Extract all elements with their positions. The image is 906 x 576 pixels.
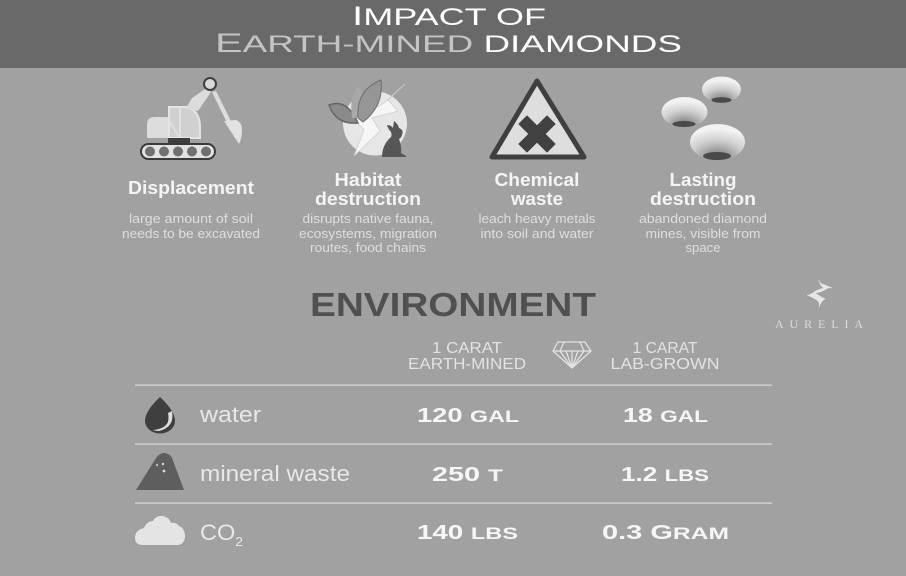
heading: Habitat — [334, 170, 402, 190]
column header: lab-grown: LAB-GROWN — [610, 356, 720, 373]
label: CO — [200, 520, 233, 545]
row: co2 — [135, 516, 729, 549]
description — [478, 212, 596, 241]
section heading: environment: ENVIRONMENT — [310, 286, 596, 323]
description: ecosystems, migration — [299, 227, 437, 241]
label: water — [199, 402, 261, 427]
panel: lasting destruction — [639, 76, 767, 255]
earth-mined value: 120 GAL — [417, 405, 519, 427]
icon: water drop — [145, 397, 175, 434]
icon: cloud — [135, 516, 185, 545]
column header: lab-grown: 1 CARAT — [632, 340, 698, 357]
heading: Chemical — [494, 170, 580, 190]
table row dividers — [135, 384, 772, 504]
title — [215, 1, 682, 58]
title: E ARTH-MINED DIAMONDS — [215, 28, 682, 58]
title: IMPACT OF — [352, 1, 546, 31]
icon: mine pits — [662, 76, 745, 160]
description: large amount of soil — [129, 212, 253, 226]
description: disrupts native fauna, — [302, 212, 434, 226]
heading: Displacement — [128, 178, 254, 198]
description — [639, 212, 767, 255]
row: water — [145, 397, 708, 434]
heading — [315, 170, 421, 209]
earth-mined value: 140 LBS — [417, 522, 518, 544]
row: mineral waste — [136, 453, 709, 490]
description: space — [686, 241, 721, 255]
description: leach heavy metals — [478, 212, 596, 226]
description — [122, 212, 260, 241]
icon: excavator — [141, 78, 242, 159]
heading — [650, 170, 756, 209]
description: abandoned diamond — [639, 212, 767, 226]
icon: hazard triangle — [492, 81, 584, 157]
lab-grown value: 0.3 G RAM — [602, 522, 729, 544]
panel: chemical waste — [478, 81, 596, 241]
column header: earth-mined — [408, 340, 526, 373]
earth-mined value: 250 T — [432, 464, 504, 486]
description: into soil and water — [480, 227, 594, 241]
lab-grown value: 18 GAL — [623, 405, 708, 427]
heading: Lasting — [670, 170, 736, 190]
column header: earth-mined: EARTH-MINED — [408, 356, 526, 373]
label: mineral waste — [200, 461, 350, 486]
icon: diamond — [553, 342, 591, 368]
icon: leaves, lightning and rabbit — [329, 80, 407, 157]
heading — [494, 170, 580, 209]
description: routes, food chains — [310, 241, 426, 255]
description: mines, visible from — [646, 227, 760, 241]
column header: earth-mined: 1 CARAT — [432, 340, 503, 357]
heading: waste — [510, 189, 563, 209]
heading: destruction — [650, 189, 756, 209]
description — [299, 212, 437, 255]
logo: aurelia — [775, 280, 863, 331]
lab-grown value: 1.2 LBS — [621, 464, 709, 486]
label: 2 — [235, 534, 243, 549]
header band — [0, 0, 906, 68]
column header: lab-grown — [610, 340, 720, 373]
panel: habitat destruction — [299, 80, 437, 255]
description: needs to be excavated — [122, 227, 260, 241]
heading: destruction — [315, 189, 421, 209]
logo: aurelia: AURELIA — [775, 317, 863, 331]
panel: displacement — [122, 78, 260, 241]
icon: mineral heap — [136, 453, 184, 490]
